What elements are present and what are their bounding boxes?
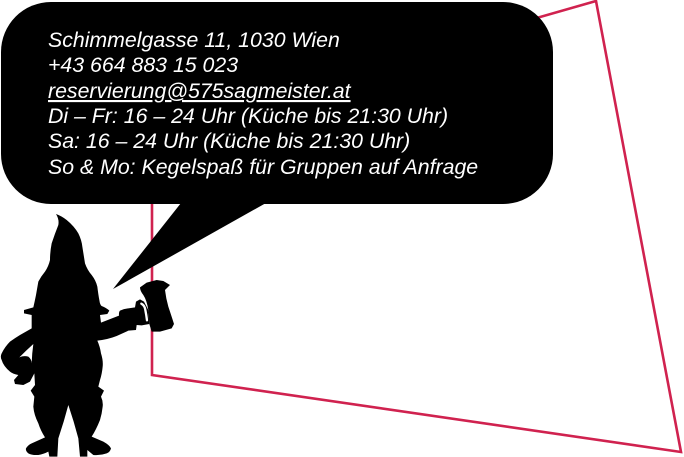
contact details text: Di – Fr: 16 – 24 Uhr (Küche bis 21:30 Uhr): [48, 104, 448, 128]
speech bubble: [1, 2, 553, 289]
contact details text: +43 664 883 15 023: [48, 53, 238, 77]
contact details text: So & Mo: Kegelspaß für Gruppen auf Anfrage: [48, 155, 478, 179]
contact details text: Schimmelgasse 11, 1030 Wien: [48, 28, 340, 52]
contact details text: [48, 28, 478, 179]
red quadrilateral frame: [152, 1, 681, 452]
icon: gnome silhouette with beer mug: [1, 214, 174, 457]
contact details text: Sa: 16 – 24 Uhr (Küche bis 21:30 Uhr): [48, 129, 410, 153]
contact details text: reservierung@575sagmeister.at: [48, 79, 352, 103]
